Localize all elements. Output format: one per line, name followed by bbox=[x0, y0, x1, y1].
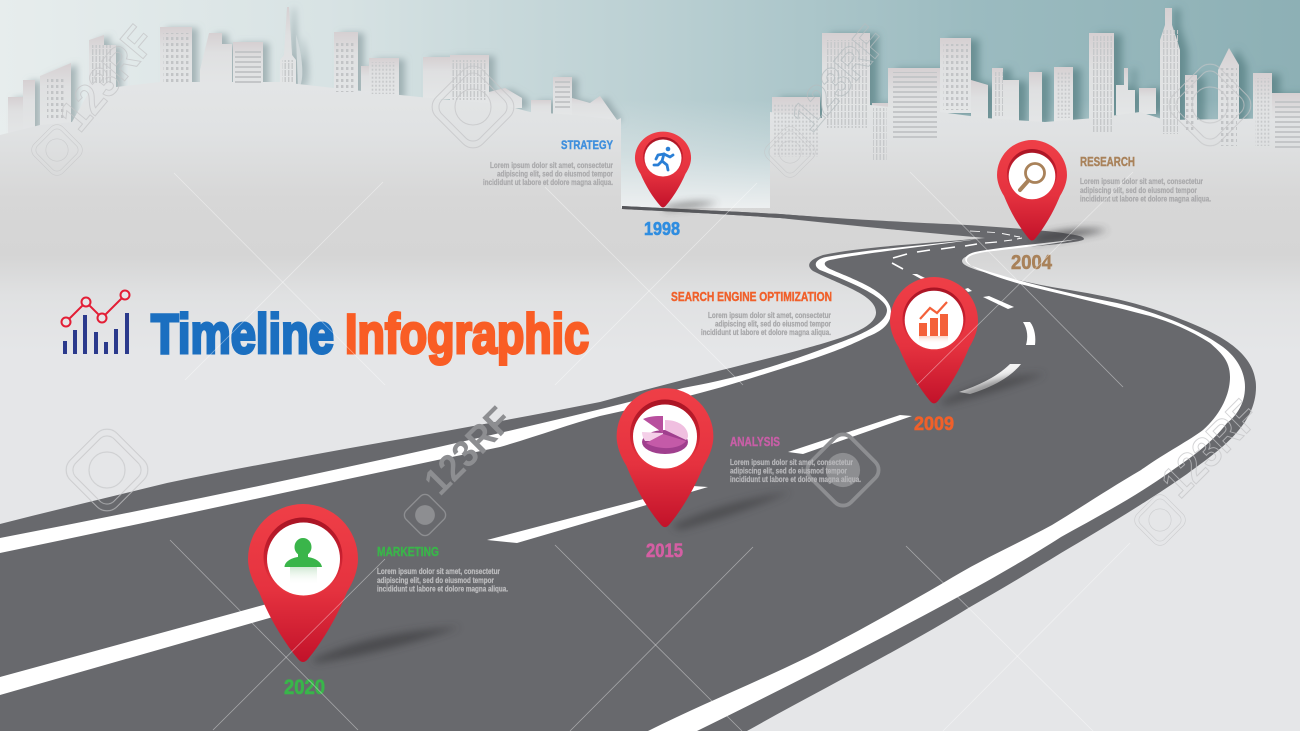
thin crossing lines bbox=[170, 172, 1133, 731]
milestone: search engine optimization 2009 bbox=[671, 277, 1045, 435]
label: SEARCH ENGINE OPTIMIZATION bbox=[671, 289, 832, 304]
description: incididunt ut labore et dolore magna aliqua. bbox=[701, 328, 831, 337]
description: Lorem ipsum dolor sit amet, consectetur bbox=[708, 311, 831, 320]
watermark: mid left bbox=[60, 423, 154, 517]
background sky and ground bbox=[0, 0, 1300, 215]
milestone: research 2004 bbox=[997, 140, 1211, 274]
label: STRATEGY bbox=[561, 138, 613, 152]
pin shadow bbox=[1033, 229, 1108, 242]
year: 1998 bbox=[644, 219, 680, 239]
description: incididunt ut labore et dolore magna aliqua. bbox=[483, 178, 613, 187]
year: 2004 bbox=[1011, 252, 1053, 274]
label: MARKETING bbox=[377, 545, 439, 559]
milestone: analysis 2015 bbox=[617, 388, 861, 562]
map pin bbox=[248, 504, 358, 662]
description: incididunt ut labore et dolore magna aliqua. bbox=[1080, 194, 1211, 204]
road surface bbox=[0, 206, 1256, 731]
title text: Timeline: Timeline bbox=[151, 302, 334, 365]
watermark: on road left: 123RF bbox=[417, 399, 521, 503]
watermark: top right text: 123RF bbox=[782, 17, 897, 140]
watermark: top left bbox=[28, 17, 165, 179]
ground plane bbox=[0, 208, 1300, 731]
pin shadow bbox=[663, 202, 718, 210]
left edge line bbox=[0, 238, 982, 553]
title text: Infographic: Infographic bbox=[345, 302, 589, 365]
pin shadow bbox=[672, 492, 790, 530]
description bbox=[730, 458, 861, 484]
description: Lorem ipsum dolor sit amet, consectetur bbox=[490, 161, 613, 170]
description bbox=[377, 567, 508, 594]
description: adipiscing elit, sed do eiusmod tempor bbox=[715, 320, 831, 328]
far road segment shade bbox=[622, 206, 900, 230]
icon: runner bbox=[654, 147, 673, 170]
watermark: on road left bbox=[402, 399, 521, 538]
description bbox=[701, 311, 831, 337]
right city skyline bbox=[770, 8, 1300, 215]
year: 2020 bbox=[284, 676, 325, 699]
milestone: marketing 2020 bbox=[248, 504, 508, 699]
watermark: right road edge: 123RF bbox=[1152, 391, 1268, 507]
icon: person bbox=[284, 538, 322, 585]
description: adipiscing elit, sed do eiusmod tempor bbox=[497, 170, 613, 178]
year: 2015 bbox=[646, 541, 683, 562]
map pin bbox=[617, 388, 713, 527]
right paper layer bbox=[770, 105, 1300, 215]
map pin bbox=[635, 132, 691, 207]
watermark: right road edge bbox=[1131, 391, 1268, 549]
left city skyline bbox=[0, 7, 621, 215]
description bbox=[483, 161, 613, 187]
description: adipiscing elit, sed do eiusmod tempor bbox=[377, 576, 494, 585]
left paper layer bbox=[0, 82, 621, 215]
title bbox=[62, 290, 589, 365]
description: adipiscing elit, sed do eiusmod tempor bbox=[730, 466, 847, 476]
description: incididunt ut labore et dolore magna aliqua. bbox=[377, 584, 508, 594]
map pin bbox=[890, 277, 978, 403]
centre dashes bbox=[0, 274, 1035, 695]
watermarks bbox=[28, 17, 1268, 549]
description: incididunt ut labore et dolore magna aliqua. bbox=[730, 475, 861, 484]
description: adipiscing elit, sed do eiusmod tempor bbox=[1080, 186, 1197, 195]
icon: magnifier bbox=[1020, 164, 1044, 190]
watermark: far right bbox=[1163, 58, 1257, 152]
watermark: top left: 123RF bbox=[50, 17, 165, 140]
description bbox=[1080, 177, 1211, 204]
pin shadow bbox=[312, 627, 460, 663]
winding road bbox=[0, 206, 1256, 731]
watermark: top right text bbox=[761, 17, 897, 181]
map pin bbox=[997, 140, 1067, 241]
description: Lorem ipsum dolor sit amet, consectetur bbox=[377, 567, 500, 576]
icon: growth bars bbox=[919, 302, 948, 344]
milestone: strategy 1998 bbox=[483, 132, 718, 239]
year: 2009 bbox=[914, 414, 954, 435]
watermark: on road centre bbox=[803, 430, 883, 510]
label: ANALYSIS bbox=[730, 435, 780, 449]
pin shadow bbox=[940, 374, 1045, 405]
label: RESEARCH bbox=[1080, 154, 1135, 169]
icon: line and bar chart bbox=[62, 290, 130, 354]
watermark: top centre bbox=[426, 60, 520, 154]
right edge line bbox=[648, 239, 1245, 731]
description: Lorem ipsum dolor sit amet, consectetur bbox=[1080, 177, 1203, 186]
description: Lorem ipsum dolor sit amet, consectetur bbox=[730, 458, 853, 467]
icon: pie chart bbox=[642, 416, 688, 454]
